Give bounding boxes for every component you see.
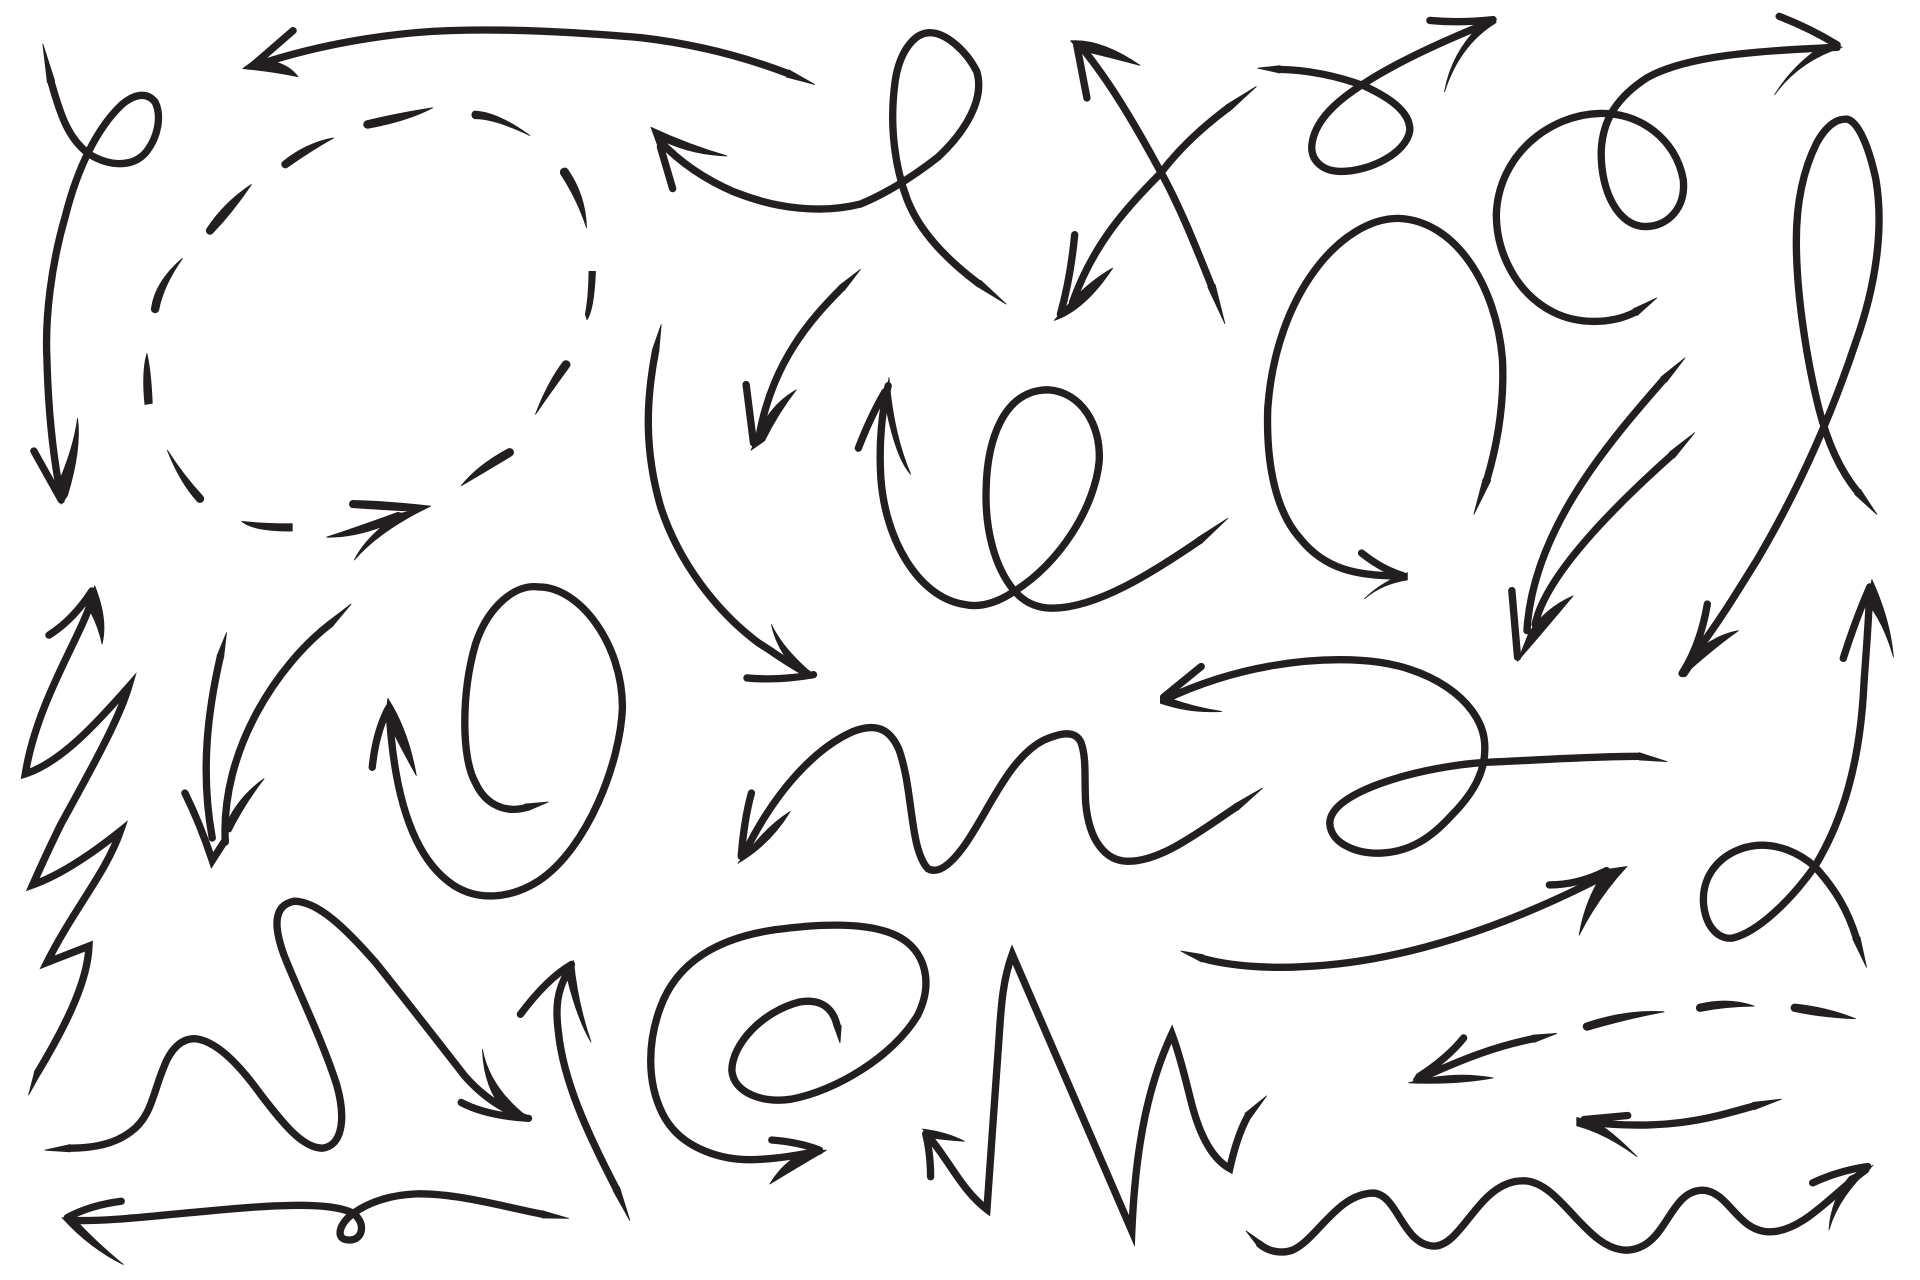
arrow: top-left loop pointing down — [34, 44, 158, 504]
arrow: squiggle pointing down-left — [738, 728, 1262, 870]
arrow: short curve pointing left — [1577, 1099, 1781, 1157]
arrow: small loop pointing up-right — [1258, 20, 1496, 171]
arrow: double loop pointing up — [858, 378, 1228, 608]
arrow: large curl pointing right — [1496, 16, 1842, 321]
arrow: bottom long with small loop pointing left — [62, 1194, 569, 1264]
arrow: dashed pointing left — [1409, 1001, 1856, 1083]
arrow: long curve pointing down-right — [648, 324, 813, 679]
arrow: oval curl pointing up — [372, 587, 622, 896]
arrow: double shaft pointing down-left — [1512, 358, 1695, 661]
arrow: wave pointing up-right — [1246, 1165, 1873, 1252]
arrow: flat loop pointing left — [1160, 660, 1667, 853]
arrow: lightning zigzag pointing up — [25, 586, 129, 1095]
arrow: tall loop pointing down-left — [1682, 119, 1879, 677]
arrow: short curve pointing down — [746, 269, 860, 450]
arrow: crossed pointing up-left — [1071, 41, 1225, 324]
arrow: double shaft pointing down — [185, 604, 351, 860]
arrow: oval pointing right — [1268, 218, 1503, 599]
arrow: top long pointing left — [243, 30, 815, 84]
arrow: curve pointing up — [520, 960, 630, 1220]
arrow: dashed circle — [144, 108, 596, 560]
arrow: right loop pointing up — [1703, 580, 1893, 967]
arrow: spiral pointing right — [651, 925, 926, 1184]
arrow: bottom-left wavy pointing down-right — [45, 901, 531, 1152]
arrow: centre loop pointing left — [651, 33, 1006, 304]
arrow: sharp zigzag pointing up-left — [922, 954, 1267, 1231]
arrow: shallow curve pointing up-right — [1181, 867, 1627, 967]
arrow: crossed pointing down-left — [1054, 87, 1256, 320]
